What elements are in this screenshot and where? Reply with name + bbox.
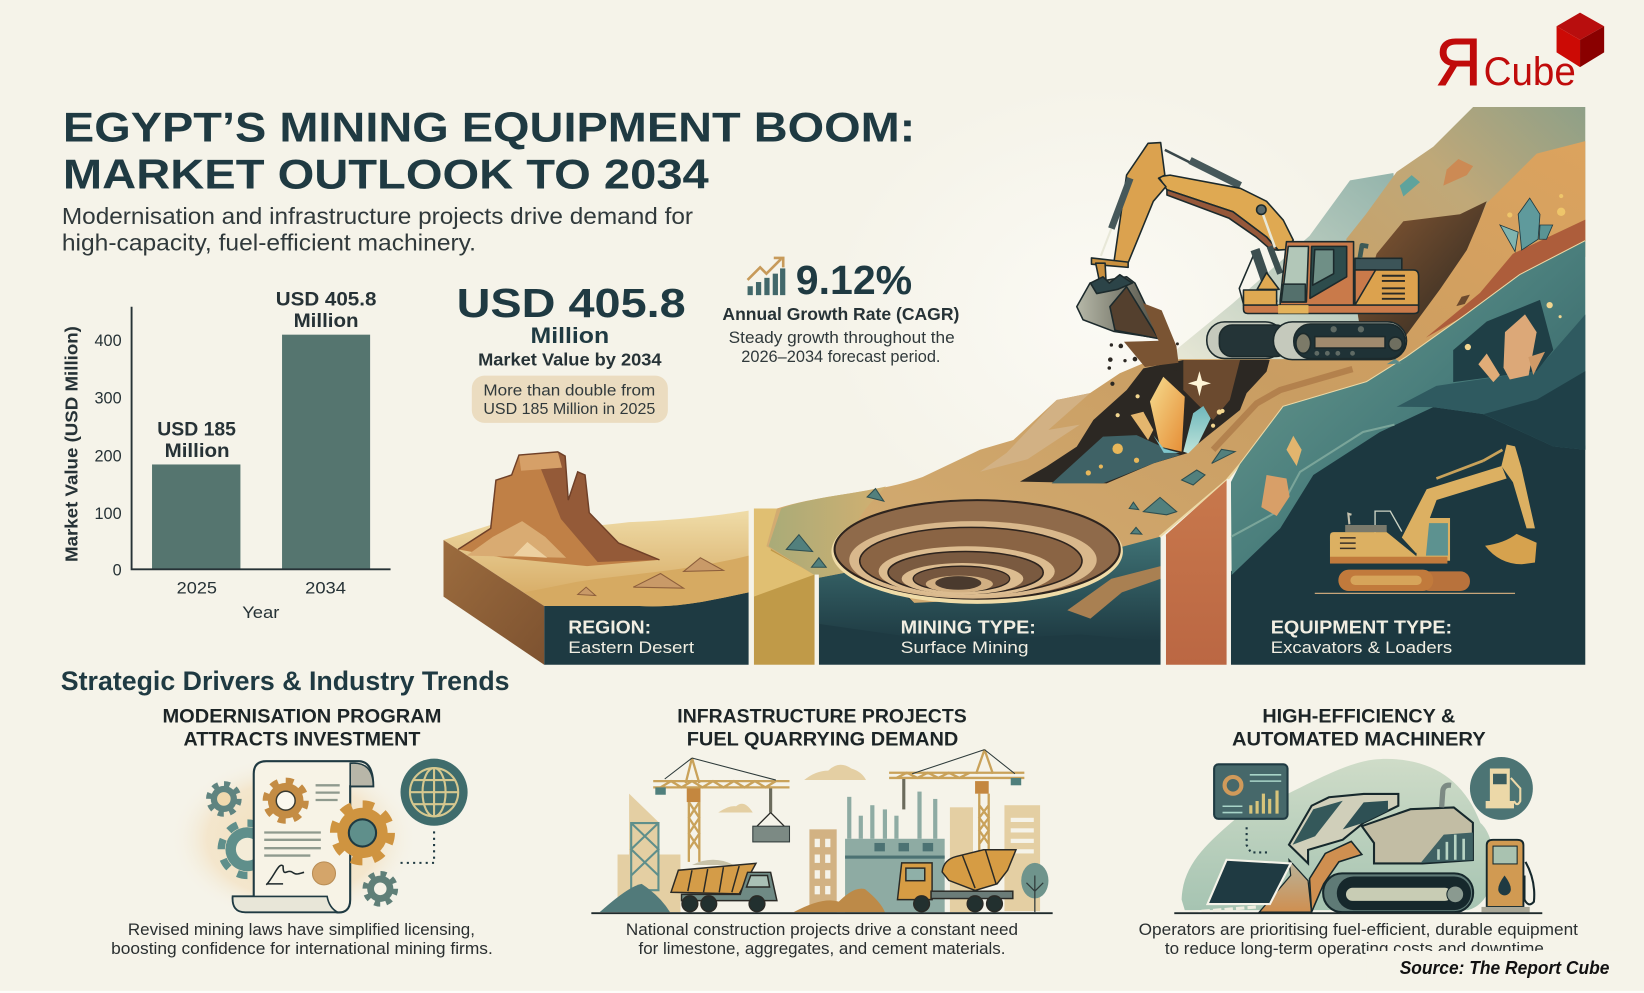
axes	[132, 307, 391, 569]
card heading: AUTOMATED MACHINERY	[1232, 728, 1486, 750]
ground line	[1174, 912, 1542, 914]
soil	[1107, 303, 1179, 386]
bucket	[1077, 275, 1162, 339]
y axis title: Market Value (USD Million)	[62, 326, 82, 562]
icon: autonomous loader	[1174, 757, 1542, 913]
panel labels: mining and equipment: EQUIPMENT TYPE:	[1271, 616, 1452, 637]
panel labels: mining and equipment: Excavators & Loaders	[1271, 638, 1452, 657]
panel: region desert	[444, 452, 749, 665]
subtitle	[62, 203, 693, 256]
subtitle: Modernisation and infrastructure projects drive demand for	[62, 203, 693, 229]
tracks	[1207, 322, 1407, 360]
dashboard panel	[1214, 764, 1288, 819]
gear	[221, 823, 274, 875]
upper mountain	[1346, 107, 1585, 336]
callout pill: More than double from	[483, 382, 655, 399]
tower crane right	[889, 750, 1024, 851]
bar labels: USD 405.8	[276, 289, 377, 311]
loader cab	[1289, 794, 1398, 863]
x axis labels	[177, 579, 346, 622]
frame and arm cylinders	[1239, 210, 1280, 304]
gear	[334, 805, 391, 861]
ore cave	[1020, 360, 1270, 483]
y axis ticks: 100	[95, 505, 122, 523]
card text: Operators are prioritising fuel-efficient, durable equipment	[1139, 921, 1578, 939]
material mounds	[600, 860, 885, 912]
bar chart: market value	[62, 289, 391, 622]
concrete mixer truck	[897, 850, 1016, 912]
icon: teal crystals	[1500, 198, 1553, 252]
bar 2034	[282, 335, 370, 569]
x axis labels: Year	[242, 603, 280, 622]
dump truck	[671, 863, 777, 912]
main excavator	[1077, 143, 1419, 386]
desert rocks	[578, 558, 723, 596]
KPI: market value	[457, 280, 686, 423]
x axis labels: 2025	[177, 579, 217, 598]
gear	[209, 784, 239, 814]
KPI: market value: USD 405.8	[457, 280, 686, 326]
small excavator cab	[1375, 511, 1450, 561]
y axis ticks: 0	[113, 562, 122, 580]
gear	[365, 874, 395, 904]
dark strata	[1484, 371, 1585, 450]
tower crane left	[653, 758, 789, 862]
card text	[1139, 921, 1578, 958]
gold strip	[754, 509, 815, 665]
title: EGYPT’S MINING EQUIPMENT BOOM:	[63, 105, 915, 151]
card heading	[677, 705, 967, 750]
loader arm	[1259, 860, 1312, 912]
card heading: ATTRACTS INVESTMENT	[183, 728, 421, 750]
loader bucket	[1208, 860, 1291, 904]
red band	[1426, 220, 1585, 338]
main tan hill	[766, 141, 1585, 603]
x axis labels: 2034	[305, 579, 346, 598]
small excavator bucket	[1485, 534, 1537, 564]
top cylinder	[1165, 150, 1240, 186]
logo wordmark: Я	[1435, 25, 1481, 100]
icon: fuel pump circle	[1470, 757, 1533, 820]
card: modernisation program	[111, 705, 493, 958]
KPI: market value: Million	[531, 323, 609, 348]
bar labels: Million	[165, 440, 230, 462]
icon: growth chart arrow	[748, 258, 785, 295]
card text: to reduce long-term operating costs and downtime.	[1165, 940, 1549, 958]
distant mountain	[1164, 173, 1410, 362]
small excavator boom	[1402, 466, 1507, 554]
card: high efficiency machinery	[1139, 705, 1578, 958]
landscape illustration	[444, 107, 1585, 666]
logo cube	[1557, 13, 1604, 67]
panel label: region	[568, 616, 694, 657]
gear	[266, 781, 306, 821]
loader body	[1362, 807, 1473, 863]
sky glow	[828, 84, 1373, 545]
tree	[1021, 863, 1048, 912]
y axis ticks: 200	[95, 447, 122, 465]
stick cylinder	[1101, 178, 1130, 256]
bar labels	[157, 289, 377, 462]
background buildings and clouds	[618, 765, 1040, 912]
far ridge	[980, 393, 1090, 472]
panel label: region: Eastern Desert	[568, 638, 694, 657]
mesa rock	[458, 452, 659, 566]
subtitle: high-capacity, fuel-efficient machinery.	[62, 230, 476, 256]
logo wordmark	[1435, 25, 1576, 100]
callout pill: USD 185 Million in 2025	[483, 401, 656, 418]
icon: construction scene	[591, 750, 1053, 913]
KPI: CAGR: 9.12%	[796, 257, 912, 303]
hillside stones	[1387, 159, 1565, 364]
document	[233, 761, 373, 912]
card heading: INFRASTRUCTURE PROJECTS	[677, 705, 967, 727]
icon: orange crystals	[1465, 302, 1562, 382]
building under construction	[845, 792, 945, 912]
panel labels: mining and equipment	[901, 616, 1452, 657]
card heading	[163, 705, 441, 750]
small excavator	[1315, 445, 1537, 593]
card text: for limestone, aggregates, and cement materials.	[639, 940, 1005, 958]
ground line	[591, 912, 1053, 914]
y axis ticks: 300	[95, 390, 122, 408]
callout pill	[472, 376, 668, 423]
hill edge highlight	[1160, 241, 1585, 537]
y axis ticks	[95, 332, 122, 580]
crystal cave	[1453, 300, 1553, 382]
loader track	[1323, 873, 1473, 912]
teal strata	[1397, 315, 1585, 450]
bar labels: Million	[294, 310, 359, 332]
brown cave	[1358, 201, 1487, 346]
bar labels: USD 185	[157, 419, 236, 441]
card heading	[1232, 705, 1486, 750]
mining pit	[831, 499, 1123, 604]
title	[63, 105, 915, 198]
section heading: Strategic Drivers & Industry Trends	[61, 666, 510, 696]
card text: boosting confidence for international mining firms.	[111, 940, 493, 958]
small excavator tracks	[1338, 570, 1470, 591]
KPI: CAGR: 2026–2034 forecast period.	[741, 348, 940, 366]
panel labels: mining and equipment: Surface Mining	[901, 638, 1029, 657]
small excavator stick	[1501, 445, 1535, 528]
ground rocks	[786, 449, 1235, 567]
card text: Revised mining laws have simplified licensing,	[128, 921, 475, 939]
panel: mining type base	[819, 524, 1161, 665]
terracotta strip	[1166, 480, 1227, 665]
small excavator body	[1330, 514, 1447, 564]
logo wordmark: Cube	[1484, 50, 1576, 94]
bar 2025	[152, 464, 240, 569]
card text: National construction projects drive a constant need	[626, 921, 1018, 939]
sage ground	[769, 486, 886, 578]
source note: Source: The Report Cube	[1400, 957, 1609, 978]
strip gaps	[749, 479, 1231, 666]
card text	[626, 921, 1018, 958]
teal rock layer	[1231, 241, 1585, 575]
card: infrastructure projects	[591, 705, 1053, 958]
icon: small orange rocks	[1261, 436, 1302, 516]
body	[1243, 242, 1419, 313]
bucket linkage	[1091, 258, 1128, 283]
panel label: region: REGION:	[568, 616, 651, 637]
KPI: CAGR: Steady growth throughout the	[729, 329, 955, 347]
icon: decree document with gears	[170, 755, 468, 923]
KPI: CAGR: Annual Growth Rate (CAGR)	[722, 304, 959, 324]
card heading: HIGH-EFFICIENCY &	[1262, 705, 1455, 727]
source patch	[1366, 951, 1623, 982]
stick	[1113, 143, 1166, 265]
panel labels: mining and equipment: MINING TYPE:	[901, 616, 1036, 637]
hill brown band	[1213, 369, 1353, 450]
KPI: CAGR	[722, 257, 959, 366]
panel: equipment type base	[1231, 404, 1585, 665]
icon: globe	[401, 759, 468, 826]
lattice tower	[631, 823, 658, 890]
card heading: MODERNISATION PROGRAM	[163, 705, 441, 727]
y axis ticks: 400	[95, 332, 122, 350]
logo: RCube	[1435, 13, 1604, 100]
bottom edge	[0, 991, 1644, 993]
icon: central crystals	[1116, 371, 1225, 453]
card text	[111, 921, 493, 958]
icon: fuel pump	[1481, 840, 1534, 912]
small excavator cylinders	[1436, 450, 1502, 479]
KPI: market value: Market Value by 2034	[478, 349, 662, 369]
card heading: FUEL QUARRYING DEMAND	[687, 728, 958, 750]
boom	[1159, 175, 1293, 250]
title: MARKET OUTLOOK TO 2034	[63, 152, 709, 198]
strata line	[1231, 425, 1394, 537]
